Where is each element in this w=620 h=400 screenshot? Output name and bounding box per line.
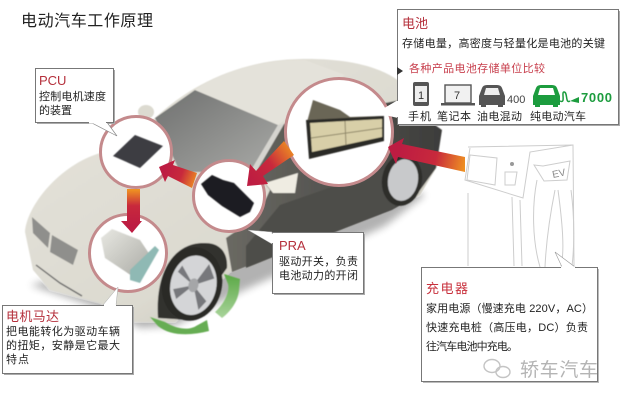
callout: motor xyxy=(2,287,134,375)
circle: motor xyxy=(90,214,166,292)
front wheel arch shadow xyxy=(158,243,227,320)
motor xyxy=(101,229,159,283)
car illustration xyxy=(25,59,442,328)
callout: PRA xyxy=(248,230,365,295)
green arrow right xyxy=(215,274,240,318)
bumper strip xyxy=(36,265,82,296)
watermark: 轿车汽车 xyxy=(520,359,598,381)
motor text: 的扭矩，安静是它最大 xyxy=(6,338,120,352)
circle: battery xyxy=(286,78,392,186)
charger heading: 充电器 xyxy=(426,281,468,296)
icon: phone xyxy=(413,82,429,106)
icon: laptop xyxy=(441,85,475,106)
PCU chip xyxy=(113,135,163,168)
callout: battery xyxy=(376,10,620,126)
PRA text: 电池动力的开闭 xyxy=(279,268,358,282)
device labels: 手机 xyxy=(408,109,431,123)
lower door xyxy=(246,165,395,268)
PCU heading: PCU xyxy=(39,73,66,88)
watermark xyxy=(484,359,598,381)
motor text: 把电能转化为驱动车辆 xyxy=(6,324,120,338)
far mirror xyxy=(138,105,154,119)
circle: PCU xyxy=(100,116,172,188)
EV charger line drawing xyxy=(465,145,574,267)
battery heading: 电池 xyxy=(402,16,428,31)
motor text: 特点 xyxy=(6,352,29,366)
PCU text: 控制电机速度 xyxy=(39,89,106,103)
EV label: EV xyxy=(551,167,567,181)
charger text: 往汽车电池中充电。 xyxy=(426,339,518,353)
car body xyxy=(25,59,438,322)
PRA text: 驱动开关，负责 xyxy=(279,254,358,268)
circle: PRA xyxy=(194,160,264,232)
marker xyxy=(397,67,403,75)
device labels: 笔记本 xyxy=(437,109,471,123)
charger text: 快速充电桩（高压电，DC）负责 xyxy=(426,320,588,334)
rear tyre xyxy=(378,151,426,209)
icon: wechat xyxy=(484,360,510,378)
side mirror xyxy=(265,173,298,193)
icon: phone: 1 xyxy=(418,90,424,102)
value 7000: 7000 xyxy=(581,90,612,105)
PRA heading: PRA xyxy=(279,238,306,253)
rear rim xyxy=(385,157,421,203)
arrow: battery to PRA xyxy=(247,141,294,186)
callout: charger xyxy=(422,252,599,383)
arrow: charger to battery xyxy=(388,138,465,172)
title: 电动汽车工作原理 xyxy=(21,12,153,30)
device labels xyxy=(408,109,586,123)
grille right xyxy=(50,235,78,265)
arrow: PRA to PCU xyxy=(159,160,197,188)
device labels: 油电混动 xyxy=(477,109,522,123)
charger text: 家用电源（慢速充电 220V，AC） xyxy=(426,301,593,315)
green rotation arrows xyxy=(150,274,240,334)
icon: electric car xyxy=(533,85,579,107)
windshield xyxy=(155,90,278,172)
arrow: PCU to motor xyxy=(121,189,142,233)
motor heading: 电机马达 xyxy=(6,309,59,324)
dark side of car xyxy=(226,100,442,272)
icon: hybrid car xyxy=(479,85,505,107)
PCU text: 的装置 xyxy=(39,103,72,117)
roof highlight xyxy=(195,60,345,125)
front tyre xyxy=(155,242,229,326)
value 400: 400 xyxy=(507,94,525,106)
PRA module xyxy=(201,175,254,217)
green arrow bottom xyxy=(150,317,209,334)
front rim xyxy=(165,251,222,319)
pillar highlight xyxy=(250,124,284,172)
icon: laptop: 7 xyxy=(454,90,460,102)
callout: PCU xyxy=(36,68,117,136)
battery pack xyxy=(306,100,384,159)
comparison heading: 各种产品电池存储单位比较 xyxy=(409,61,545,75)
grille left xyxy=(32,217,50,248)
device labels: 纯电动汽车 xyxy=(530,109,586,123)
battery description: 存储电量，高密度与轻量化是电池的关键 xyxy=(402,36,605,50)
